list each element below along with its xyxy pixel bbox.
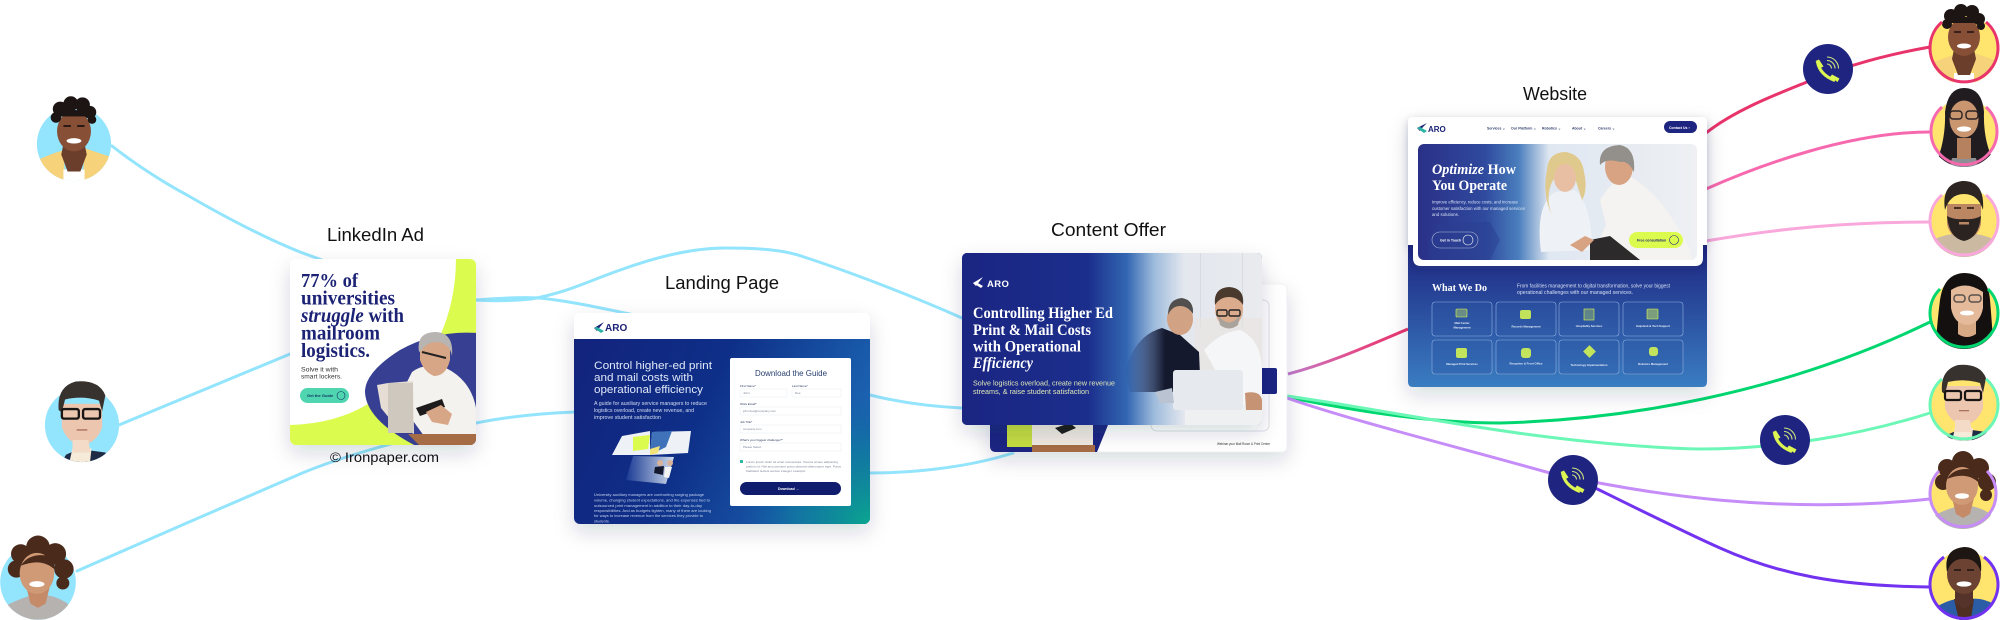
text: hero copy: Improve efficiency, reduce costs, and increase (1432, 200, 1518, 204)
form: download the guide: pretium id. Nisl arcu posuere purus placerat ullamcorper eget. Purus (746, 464, 842, 468)
text: offer headline (972, 305, 1113, 372)
grid: service tiles: Technology Implementation (1571, 363, 1608, 367)
heading: Landing Page: Landing Page (665, 273, 779, 293)
text: hero copy: and solutions. (1432, 212, 1459, 217)
nav: menu: Our Platform ⌄ (1511, 126, 1536, 130)
text: landing body copy: volume, changing student expectations, and the expenses tied to (594, 498, 710, 502)
section: website top white panel (1408, 117, 1707, 266)
connector line: offer to lavender avatar (1287, 398, 1930, 505)
avatar: right 4 (1930, 273, 1998, 354)
form: download the guide: Download → (778, 487, 799, 491)
nav: menu (1487, 126, 1615, 130)
text: landing headline: Control higher-ed print (594, 360, 712, 372)
connector line: call to purple avatar (1575, 478, 1930, 587)
connector lines: leads to LinkedIn ad (77, 146, 1013, 571)
button: contact us: Contact Us › (1669, 126, 1690, 130)
logo: ARO white (973, 277, 1008, 288)
text: offer subline (973, 380, 1115, 395)
text: what we do intro: From facilities management to digital transformation, solve your biggest (1517, 284, 1671, 290)
text: landing body copy: University auxiliary managers are confronting surging package (594, 493, 704, 497)
nav: menu: Careers ⌄ (1598, 126, 1615, 130)
grid: service tiles: Reception & Front Office (1510, 362, 1543, 366)
text: landing headline (594, 360, 712, 396)
form: download the guide (730, 358, 851, 506)
text: ad headline (300, 271, 404, 362)
text: ad headline: logistics. (301, 341, 370, 362)
form: download the guide: Lorem ipsum dolor sit amet consectetur. Viverra ornare adipiscing (746, 460, 838, 464)
avatar: right 2 (1931, 88, 1997, 174)
text: landing body copy: for ways to increase revenue from the services they provide to (594, 514, 703, 518)
text: ad headline: universities (301, 288, 395, 310)
form: download the guide: Please Select (743, 445, 762, 449)
form: download the guide: habitant lectus lectus integer suscipit. (746, 469, 806, 473)
button: get the guide (300, 388, 349, 403)
text: landing sub copy: A guide for auxiliary service managers to reduce (594, 401, 707, 407)
form: download the guide: First Name* (740, 384, 757, 388)
button: get in touch: Get in Touch (1440, 238, 1461, 242)
logo: ARO (1417, 123, 1446, 134)
avatar: right 7 (1928, 547, 2000, 620)
image: brochures (612, 431, 691, 484)
icon: phone call 3 (1548, 455, 1598, 505)
text: ad headline: 77% of (301, 271, 358, 292)
text: hero headline: Optimize How (1432, 162, 1517, 178)
panel: LinkedIn ad (289, 258, 477, 446)
button: get in touch (1432, 232, 1478, 248)
grid: service tiles: Records Management (1511, 324, 1541, 328)
hero (1418, 144, 1697, 260)
connector line: content offer to website (1288, 329, 1408, 374)
heading: LinkedIn Ad: LinkedIn Ad (327, 225, 424, 245)
form: download the guide: What's your biggest challenge?* (740, 438, 784, 442)
panel: landing page (574, 313, 870, 524)
text: ad subline (301, 367, 342, 378)
caption: copyright: © Ironpaper.com (330, 449, 439, 465)
form: download the guide: Work Email* (740, 402, 757, 406)
photo: woman and man (1540, 145, 1692, 260)
button: free consultation (1629, 232, 1683, 248)
grid: service tiles: Hospitality Services (1576, 324, 1603, 328)
avatar: left woman (36, 96, 112, 186)
avatar: right 3 (1928, 181, 2000, 262)
image: ad peek behind offer (990, 423, 1108, 452)
form: download the guide: John (743, 391, 750, 395)
text: hero copy (1432, 200, 1526, 217)
text: offer headline: Print & Mail Costs (973, 322, 1091, 339)
avatar: left man with glasses (45, 381, 119, 467)
text: hero headline (1432, 162, 1517, 194)
icon: phone call 1 (1803, 44, 1853, 94)
shape: lime top right (441, 259, 476, 334)
nav: menu: Services ⌄ (1487, 126, 1505, 130)
logo: ARO white: ARO (987, 279, 1009, 290)
connector line: website to red avatar (1706, 47, 1930, 133)
text: offer headline: with Operational (973, 338, 1082, 356)
logo: ARO: ARO (605, 323, 627, 334)
section: what we do background (1408, 245, 1707, 387)
nav: menu: Robotics ⌄ (1542, 126, 1561, 130)
form: download the guide: Download the Guide (755, 368, 827, 378)
shape: indigo blob (365, 333, 477, 446)
text: ad headline: struggle with (300, 306, 404, 327)
nav: menu: About ⌄ (1572, 126, 1586, 130)
text: ad headline: mailroom (301, 324, 380, 344)
grid: service tiles: Mail Center (1454, 321, 1470, 325)
grid: service tiles: Robotics Management (1638, 362, 1668, 366)
avatar: right 6 (1927, 451, 1999, 534)
connector line: website to light pink avatar (1706, 222, 1930, 241)
text: ad subline: Solve it with (301, 366, 338, 374)
grid: service tiles: Managed Print Services (1446, 362, 1478, 366)
avatar: right 5 (1930, 365, 1998, 446)
text: landing body copy: responsibilities. And as budgets tighten, many of them are looking (594, 509, 711, 513)
photo: two men with laptop (1125, 287, 1262, 410)
text: landing sub copy: logistics overload, create new revenue, and (594, 408, 694, 414)
text: what we do intro (1517, 284, 1671, 296)
text: landing headline: and mail costs with (594, 372, 693, 384)
text: landing headline: operational efficiency (594, 384, 704, 396)
grid: service tiles (1432, 302, 1683, 374)
text: landing body copy: outsourced print management in addition to their day-to-day (594, 504, 702, 508)
form: download the guide: Job Title* (740, 420, 753, 424)
form: download the guide: john.doe@company.com (742, 409, 777, 413)
text: landing body copy (594, 493, 711, 524)
connector line: website to pink avatar (1706, 132, 1930, 189)
form: download the guide: company.com (743, 427, 762, 431)
heading: what we do: What We Do (1432, 283, 1487, 294)
shape: lime bottom (289, 404, 418, 446)
text: what we do intro: operational challenges with our managed services. (1517, 290, 1633, 296)
logo: ARO: ARO (1428, 125, 1446, 134)
button: free consultation: Free consultation (1637, 238, 1666, 242)
grid: service tiles: Management (1453, 326, 1471, 330)
panel: content offer back page (990, 284, 1287, 452)
panel: content offer front (962, 253, 1262, 425)
panel: website (1408, 117, 1707, 387)
form: download the guide: Doe (795, 391, 801, 395)
text: footer note: Webinar your Mail Room & Print Center (1217, 442, 1271, 446)
text: hero headline: You Operate (1432, 178, 1508, 194)
button: contact us (1664, 121, 1697, 133)
icon: phone call 2 (1760, 415, 1810, 465)
grid: service tiles: Helpdesk & Tech Support (1636, 324, 1670, 328)
text: landing sub copy (594, 401, 707, 421)
text: offer headline: Efficiency (972, 355, 1033, 372)
logo: ARO (594, 322, 627, 334)
text: hero copy: customer satisfaction with our managed services (1432, 206, 1526, 211)
text: landing sub copy: improve student satisfaction (594, 415, 661, 421)
connector line: offer to green avatar (1287, 322, 1930, 423)
button: get the guide: Get the Guide (307, 393, 334, 398)
connector line: offer to mint avatar (1287, 396, 1930, 449)
text: offer headline: Controlling Higher Ed (973, 305, 1113, 322)
text: offer subline: Solve logistics overload, create new revenue (973, 378, 1115, 388)
heading: Website: Website (1523, 84, 1587, 104)
avatar: left curly-haired woman (0, 536, 77, 620)
photo: man with package (377, 332, 477, 446)
heading: Content Offer: Content Offer (1051, 220, 1166, 240)
form: download the guide: Last Name* (792, 384, 809, 388)
text: landing body copy: students. (594, 520, 610, 524)
tab: navy tab (1256, 368, 1277, 394)
text: ad subline: smart lockers. (301, 374, 342, 380)
avatar: right 1 (1928, 4, 2000, 89)
text: offer subline: streams, & raise student satisfaction (973, 387, 1089, 396)
